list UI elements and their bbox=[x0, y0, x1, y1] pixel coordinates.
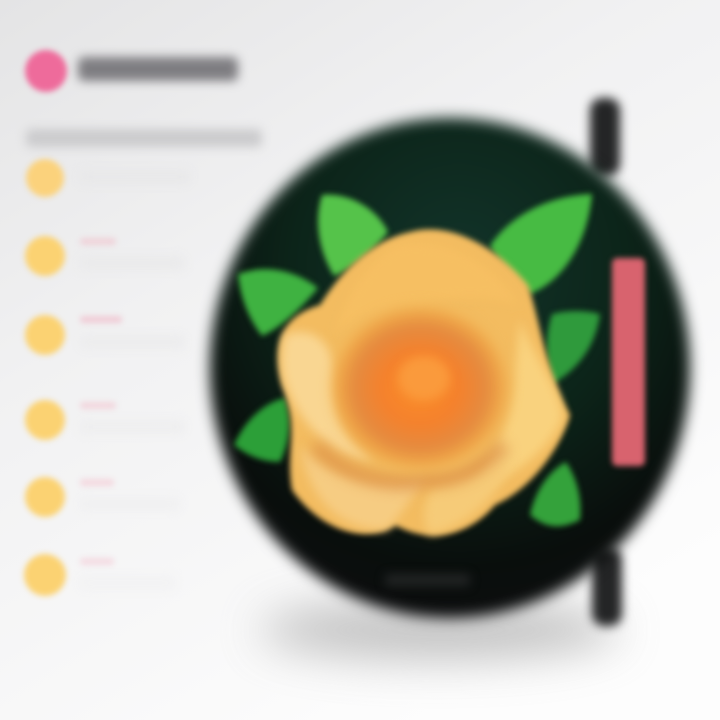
disc bbox=[210, 118, 690, 618]
list of six items bbox=[24, 159, 190, 596]
leaf: lower right bbox=[530, 462, 580, 526]
leaf: right bbox=[547, 311, 600, 384]
leaf: top right bbox=[490, 194, 592, 294]
list item 2 bbox=[25, 236, 185, 276]
list item 1 bbox=[26, 159, 190, 197]
lower right petal bbox=[424, 460, 510, 535]
right pale petal bbox=[470, 320, 562, 490]
rose flower bbox=[278, 229, 570, 535]
center swirl bbox=[398, 356, 450, 400]
lower fold shadows bbox=[315, 445, 505, 483]
orange core bbox=[325, 300, 515, 476]
leaf: left bbox=[238, 269, 318, 336]
leaves bbox=[234, 194, 600, 526]
red vertical label bbox=[612, 258, 645, 466]
header: pink badge and title bbox=[25, 50, 238, 92]
icon: pink badge bbox=[25, 50, 67, 92]
heading: title bbox=[78, 57, 238, 81]
list item 3 bbox=[25, 315, 185, 355]
list item 4 bbox=[25, 400, 185, 440]
list item 6 bbox=[24, 554, 175, 596]
subtitle bbox=[26, 129, 262, 147]
list item 5 bbox=[25, 477, 180, 517]
dark circular disc with handles bbox=[210, 98, 690, 626]
bottom handle bbox=[592, 548, 622, 626]
drop shadow under disc bbox=[260, 600, 620, 660]
top handle bbox=[590, 98, 620, 176]
bottom caption on disc bbox=[385, 574, 470, 586]
upper highlight petal bbox=[335, 243, 520, 335]
leaf: top left bbox=[318, 195, 388, 276]
left pale petal bbox=[282, 332, 375, 460]
outer petals bbox=[278, 229, 570, 535]
leaf: lower left bbox=[234, 398, 289, 462]
lower left petal bbox=[300, 445, 425, 530]
